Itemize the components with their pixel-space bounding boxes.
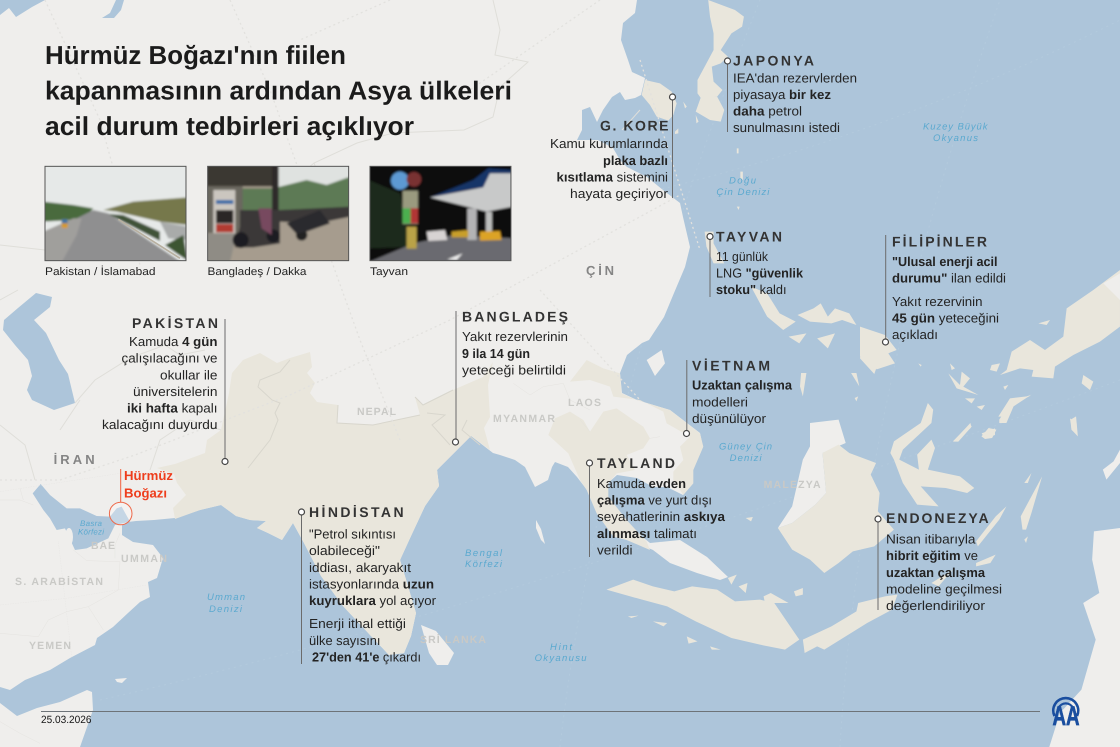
text: Pakistan body: çalışılacağını ve: [122, 351, 218, 366]
text: South Korea body: Kamu kurumlarında: [550, 136, 669, 151]
sea labels: Basra: [80, 519, 103, 528]
text: South Korea body: kısıtlama sistemini: [556, 170, 668, 184]
photo captions: [45, 265, 408, 278]
title: [45, 40, 512, 141]
text: Taiwan body: stoku" kaldı: [716, 282, 786, 297]
photo: Taiwan: [368, 165, 513, 262]
text: Thailand body: verildi: [597, 543, 633, 558]
text: Thailand body: alınması talimatı: [597, 526, 697, 541]
text: Bangladesh body: [462, 329, 568, 378]
text: Vietnam body: [692, 378, 793, 426]
country labels on map: S. ARABİSTAN: [15, 576, 103, 588]
sea labels: Denizi: [209, 604, 243, 615]
footer rule: [41, 710, 1040, 712]
title: kapanmasının ardından Asya ülkeleri: [45, 76, 512, 106]
sea labels: [78, 122, 989, 664]
country labels on map: UMMAN: [121, 553, 167, 565]
callout: Vietnam: VİETNAM: [692, 358, 770, 374]
icon: AA logo: [1052, 698, 1080, 731]
photo captions: Bangladeş / Dakka: [208, 266, 307, 278]
water: Persian Gulf: [33, 484, 130, 550]
text: Pakistan body: üniversitelerin: [133, 384, 218, 399]
text: Indonesia body: Nisan itibarıyla: [886, 532, 976, 547]
sea labels: Hint: [550, 642, 572, 653]
country labels on map: BAE: [91, 540, 115, 552]
country labels on map: MALEZYA: [764, 479, 821, 491]
photo: Pakistan Islamabad: [43, 165, 188, 262]
country labels on map: SRİ LANKA: [420, 634, 486, 646]
callout: Bangladesh: BANGLADEŞ: [462, 309, 568, 325]
land: Indonesia and Borneo: [606, 373, 1120, 747]
callout: Philippines: FİLİPİNLER: [892, 234, 987, 250]
text: India body: olabileceği": [309, 543, 380, 558]
sea labels: Doğu: [729, 176, 757, 187]
text: India body: iddiası, akaryakıt: [309, 560, 411, 575]
sea labels: Denizi: [730, 453, 762, 464]
callout: Hormuz Strait: Boğazı: [124, 486, 167, 501]
country labels on map: NEPAL: [357, 406, 397, 418]
text: Taiwan body: [716, 249, 804, 297]
callout: Hormuz Strait: [109, 468, 174, 525]
callout: Pakistan: [102, 315, 228, 464]
text: Bangladesh body: Yakıt rezervlerinin: [462, 329, 568, 344]
land: Qatar: [65, 528, 73, 546]
text: Pakistan body: iki hafta kapalı: [127, 400, 218, 415]
callout: Vietnam: [684, 358, 793, 436]
callout: Thailand: [586, 455, 726, 558]
text: Taiwan body: 11 günlük: [716, 249, 768, 264]
sea labels: Çin Denizi: [716, 187, 770, 198]
land: Sri Lanka: [421, 625, 454, 665]
callout: Japan: [724, 53, 857, 135]
highlight: Pakistan India Bangladesh: [157, 352, 493, 655]
text: Indonesia body: değerlendiriliyor: [886, 598, 986, 613]
callout: Hormuz Strait: Hürmüz: [124, 468, 174, 483]
text: India body: 27'den 41'e çıkardı: [312, 650, 421, 664]
text: Pakistan body: kalacağını duyurdu: [102, 417, 218, 432]
text: Pakistan body: [102, 334, 218, 432]
callout: Pakistan: PAKİSTAN: [132, 315, 218, 331]
text: South Korea body: hayata geçiriyor: [570, 186, 669, 201]
photo captions: Pakistan / İslamabad: [45, 265, 156, 278]
text: Thailand body: Kamuda evden: [597, 476, 686, 491]
land: Hainan: [647, 350, 665, 376]
sea labels: Güney Çin: [719, 442, 772, 453]
callout: Bangladesh: [452, 309, 568, 445]
sea labels: Okyanusu: [535, 653, 587, 664]
text: Indonesia body: uzaktan çalışma: [886, 565, 986, 580]
text: Thailand body: çalışma ve yurt dışı: [597, 493, 712, 508]
callout: Thailand: TAYLAND: [597, 455, 675, 471]
water: northern lakes: [0, 0, 124, 18]
text: Philippines body: durumu" ilan edildi: [892, 271, 1006, 286]
text: Thailand body: [597, 476, 726, 558]
text: India body: Enerji ithal ettiği: [309, 616, 406, 631]
text: South Korea body: [550, 136, 669, 201]
callout: South Korea: [550, 94, 676, 201]
photo strip: [43, 165, 513, 262]
text: India body: "Petrol sıkıntısı: [309, 527, 396, 542]
text: India body: [309, 527, 437, 664]
country labels on map: [15, 263, 821, 652]
text: Japan body: piyasaya bir kez: [733, 87, 832, 102]
land: Papua and eastern islands: [860, 270, 1120, 442]
sea labels: Okyanus: [933, 133, 978, 144]
land: Africa: [0, 690, 93, 747]
callout: Taiwan: [707, 228, 804, 297]
text: Philippines body: "Ulusal enerji acil: [892, 254, 998, 269]
text: Japan body: [733, 70, 857, 135]
highlight: South Korea: [642, 80, 677, 121]
text: India body: ülke sayısını: [309, 633, 380, 648]
text: India body: kuyruklara yol açıyor: [309, 593, 437, 608]
text: Philippines body: açıkladı: [892, 327, 938, 342]
text: Philippines body: Yakıt rezervinin: [892, 294, 982, 309]
text: Pakistan body: okullar ile: [160, 367, 218, 382]
callout: Japan: JAPONYA: [733, 53, 814, 69]
land: Japan, Taiwan and Philippines: [683, 0, 896, 374]
text: Japan body: sunulmasını istedi: [733, 120, 840, 135]
callout: Taiwan: TAYVAN: [716, 228, 782, 244]
text: Indonesia body: modeline geçilmesi: [886, 582, 1002, 596]
sea labels: Kuzey Büyük: [923, 122, 989, 133]
text: Philippines body: 45 gün yeteceğini: [892, 311, 999, 326]
sea labels: Körfezi: [78, 528, 104, 536]
sea labels: Umman: [207, 592, 245, 603]
callout: Philippines: [882, 234, 1006, 345]
icon: AA logo: AA: [1052, 701, 1080, 731]
country labels on map: YEMEN: [29, 640, 71, 652]
text: Japan body: IEA'dan rezervlerden: [733, 70, 857, 86]
borders and grid lines: [0, 0, 700, 743]
callout: South Korea: G. KORE: [600, 118, 668, 134]
callout: Indonesia: ENDONEZYA: [886, 510, 989, 526]
photo captions: Tayvan: [370, 266, 408, 278]
text: Philippines body: [892, 254, 1006, 342]
text: Vietnam body: modelleri: [692, 394, 748, 410]
text: Bangladesh body: 9 ila 14 gün: [462, 346, 530, 361]
text: South Korea body: plaka bazlı: [603, 153, 668, 168]
country labels on map: ÇİN: [586, 263, 614, 278]
text: Indonesia body: hibrit eğitim ve: [886, 548, 978, 563]
callout: India: [298, 504, 437, 664]
water: Caspian Sea: [3, 293, 75, 410]
text: Japan body: daha petrol: [733, 104, 802, 118]
country labels on map: LAOS: [568, 397, 601, 409]
text: Pakistan body: Kamuda 4 gün: [129, 334, 218, 349]
text: Vietnam body: düşünülüyor: [692, 411, 767, 426]
text: Indonesia body: [886, 532, 1002, 613]
text: Thailand body: seyahatlerinin askıya: [597, 509, 726, 524]
date: 25.03.2026: [41, 714, 92, 726]
text: Taiwan body: LNG "güvenlik: [716, 266, 804, 281]
highlight: Thailand and Vietnam: [513, 360, 703, 550]
highlight: Indian peninsula: [290, 460, 439, 655]
sea labels: Bengal: [465, 548, 503, 559]
callout: Indonesia: [875, 510, 1002, 613]
country labels on map: MYANMAR: [493, 413, 555, 425]
callout: India: HİNDİSTAN: [309, 504, 404, 520]
sea labels: Körfezi: [465, 559, 503, 570]
country labels on map: İRAN: [54, 452, 95, 467]
land: Australia: [1049, 528, 1120, 747]
title: Hürmüz Boğazı'nın fiilen: [45, 40, 346, 70]
text: Bangladesh body: yeteceği belirtildi: [462, 362, 566, 378]
title: acil durum tedbirleri açıklıyor: [45, 111, 414, 141]
text: India body: istasyonlarında uzun: [309, 577, 434, 592]
text: Vietnam body: Uzaktan çalışma: [692, 378, 793, 393]
photo: Bangladesh Dhaka: [206, 165, 350, 262]
